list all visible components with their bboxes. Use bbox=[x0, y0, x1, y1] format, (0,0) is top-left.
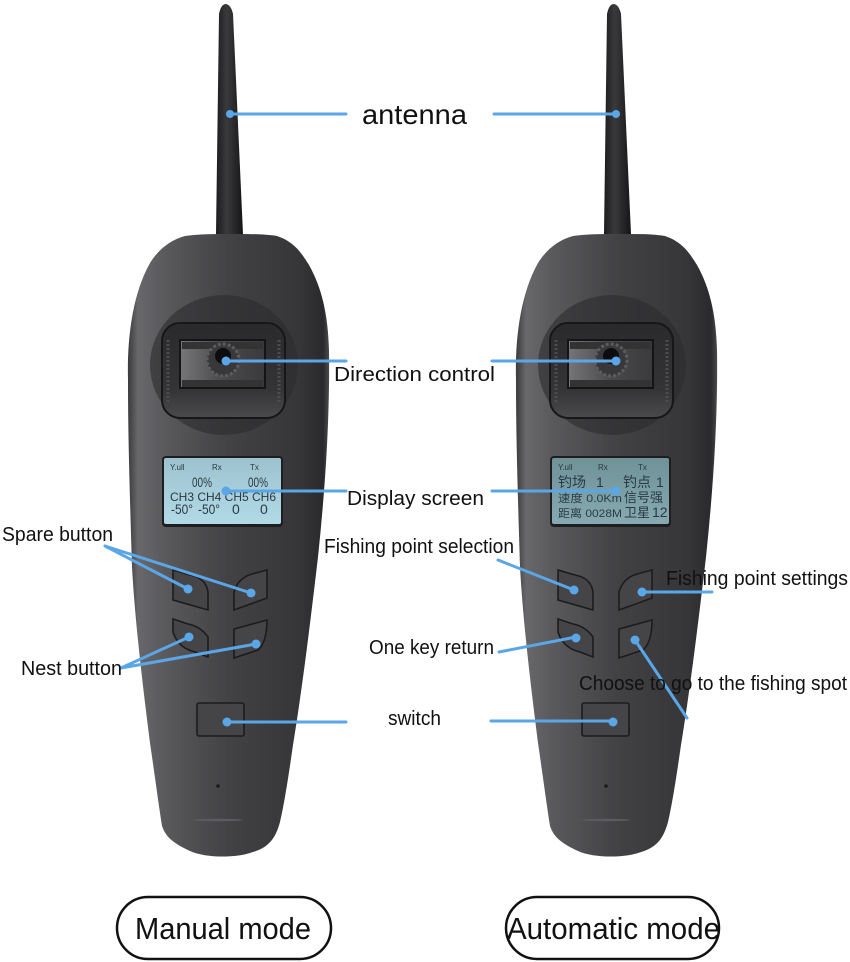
display screen: manual: CH3 CH4 CH5 CH6 bbox=[170, 490, 276, 504]
display screen: automatic: 钓场 bbox=[558, 474, 586, 490]
callout lines and dots bbox=[105, 110, 712, 726]
display screen: manual: 0 bbox=[232, 501, 240, 517]
display screen: automatic: 信号强 bbox=[624, 490, 663, 505]
display screen: automatic: 12 bbox=[652, 504, 668, 520]
display screen: manual: Y.ull bbox=[170, 463, 185, 472]
badge: manual mode bbox=[117, 897, 331, 959]
label: display screen: Display screen bbox=[347, 488, 484, 510]
display screen: automatic: Tx bbox=[638, 463, 647, 472]
display screen: manual bbox=[164, 458, 281, 524]
label: one key return: One key return bbox=[369, 637, 494, 659]
badge: automatic mode bbox=[506, 897, 720, 959]
label: nest button: Nest button bbox=[21, 658, 122, 680]
display screen: manual: 0 bbox=[260, 501, 268, 517]
badge: manual mode: Manual mode bbox=[135, 911, 311, 946]
label: direction control: Direction control bbox=[334, 364, 495, 386]
display screen: manual: -50° bbox=[198, 501, 220, 517]
label: fishing point settings: Fishing point settings bbox=[666, 568, 848, 590]
display screen: automatic: Rx bbox=[598, 463, 608, 472]
display screen: automatic: 距离 0028M bbox=[558, 506, 622, 520]
display screen: manual: 00% bbox=[192, 474, 212, 490]
label: switch: switch bbox=[388, 708, 441, 730]
display screen: automatic: 卫星 bbox=[624, 505, 650, 520]
display screen: manual: Rx bbox=[212, 463, 222, 472]
display screen: automatic: Y.ull bbox=[558, 463, 573, 472]
badge: automatic mode: Automatic mode bbox=[507, 911, 720, 946]
display screen: automatic: 钓点 bbox=[623, 474, 651, 490]
display screen: automatic: 1 bbox=[656, 474, 664, 490]
display screen: automatic bbox=[552, 458, 669, 524]
device: manual mode remote bbox=[128, 4, 329, 857]
label: spare button: Spare button bbox=[2, 524, 113, 546]
display screen: manual: -50° bbox=[171, 501, 193, 517]
display screen: manual: Tx bbox=[250, 463, 259, 472]
display screen: manual: 00% bbox=[248, 474, 268, 490]
device: automatic mode remote bbox=[516, 4, 717, 857]
label: antenna: antenna bbox=[362, 99, 467, 130]
display screen: automatic: 速度 0.0Km bbox=[558, 491, 622, 505]
label: fishing point selection: Fishing point selection bbox=[324, 536, 514, 558]
display screen: automatic: 1 bbox=[596, 474, 604, 490]
